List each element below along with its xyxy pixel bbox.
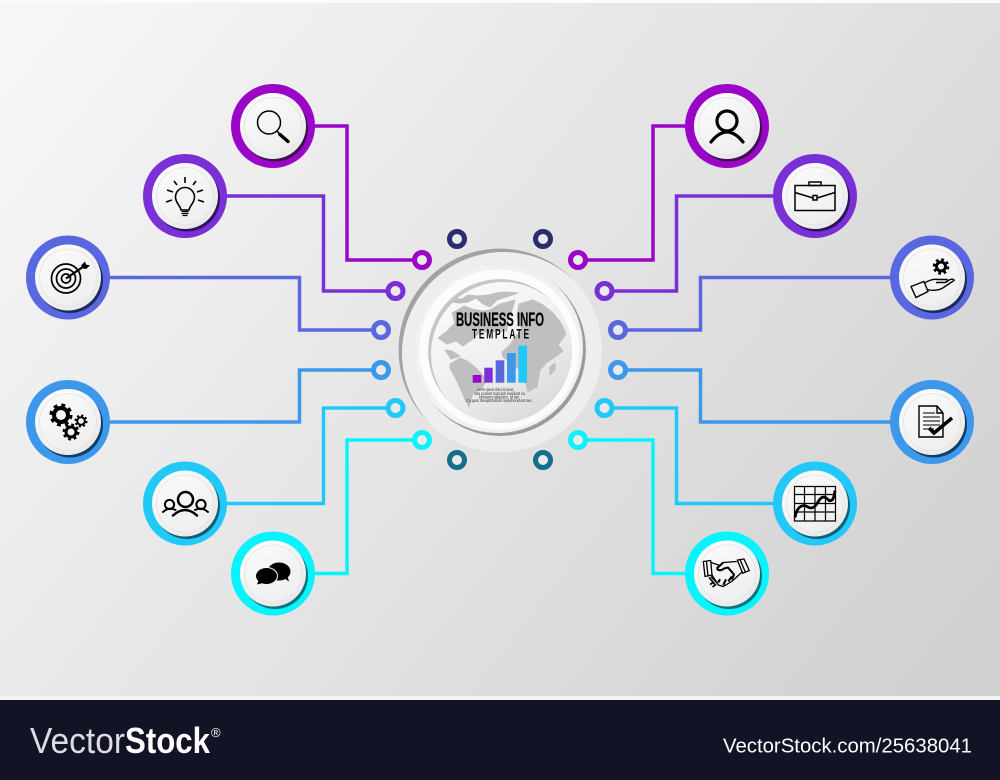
node: team xyxy=(143,462,227,546)
node: business xyxy=(773,154,857,238)
connector end rings xyxy=(374,232,626,468)
icon: hand with gear xyxy=(911,260,954,298)
icon: magnifier xyxy=(258,111,288,142)
node: idea xyxy=(143,154,227,238)
icon: speech bubbles xyxy=(255,562,290,585)
logo: VectorStock xyxy=(30,720,211,761)
icon: people xyxy=(163,492,208,516)
node: chart xyxy=(773,462,857,546)
mini bar chart xyxy=(473,346,527,383)
icon: target with arrow xyxy=(52,262,90,293)
node: document xyxy=(890,380,974,464)
registered mark: ® xyxy=(211,725,221,740)
hub caption: Cu quis theophrastus reprehendunt nec. xyxy=(466,398,533,403)
node: partnership xyxy=(685,532,769,616)
icon: user xyxy=(711,111,743,142)
node: chat xyxy=(231,532,315,616)
node: target xyxy=(26,236,110,320)
icon: light bulb xyxy=(166,177,204,216)
icon: handshake xyxy=(703,559,749,587)
hub caption: Nonumy aliquam. id ian xyxy=(479,394,519,399)
subtitle: TEMPLATE xyxy=(472,328,529,342)
title: BUSINESS INFO xyxy=(456,309,544,331)
footer bar xyxy=(0,700,1000,780)
hub caption: Lorem ipsum dolor sit amet, xyxy=(477,387,514,392)
node: profile xyxy=(685,84,769,168)
globe xyxy=(428,279,575,426)
icon: checked document xyxy=(919,406,952,437)
icon: line chart on grid xyxy=(794,486,836,521)
node: service xyxy=(890,236,974,320)
central hub xyxy=(398,248,605,455)
node: search xyxy=(231,84,315,168)
image id: VectorStock.com/25638041 xyxy=(723,736,972,758)
hub caption: Vas putant suscipit invidunt cu xyxy=(474,391,525,396)
icon: gears xyxy=(51,405,86,439)
icon: briefcase xyxy=(795,182,835,210)
node: gears xyxy=(26,380,110,464)
hub caption xyxy=(466,387,533,403)
connector lines xyxy=(106,126,894,574)
